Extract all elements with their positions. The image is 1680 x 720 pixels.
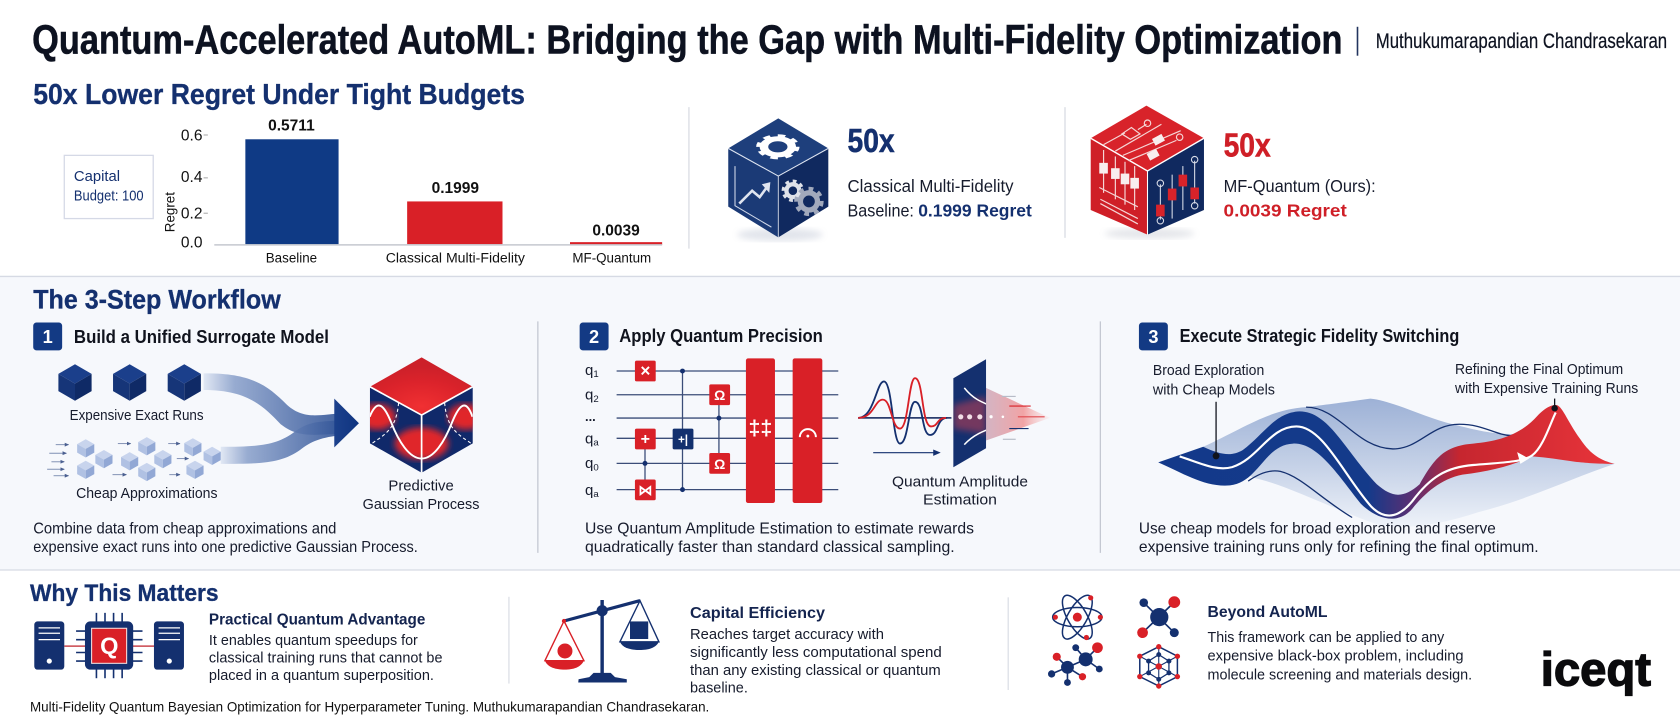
icon: lattice [1137, 644, 1180, 689]
step 3 title: Execute Strategic Fidelity Switching [1180, 326, 1459, 346]
bar chart: regret: Baseline [266, 251, 317, 266]
label: quantum amplitude estimation [892, 473, 1028, 509]
heading: workflow: The 3-Step Workflow [33, 285, 281, 315]
bar chart: regret: 0.5711 [268, 118, 315, 135]
panel: step 3 [1139, 322, 1638, 556]
step 2 badge [580, 322, 609, 350]
label: refining optimum: with Expensive Training Runs [1454, 380, 1638, 397]
quantum circuit: 1 [593, 369, 599, 380]
label: broad exploration: Broad Exploration [1153, 362, 1264, 379]
panel: step 1 [33, 322, 484, 556]
label: predictive GP: Gaussian Process [363, 496, 479, 513]
label: quantum amplitude estimation: Estimation [923, 492, 997, 509]
logo: iceqt: iceqt [1541, 643, 1651, 696]
bar chart: regret [163, 118, 662, 266]
title: Quantum-Accelerated AutoML: Bridging the Gap with Multi-Fidelity Optimization [32, 17, 1342, 63]
icon: quantum chip between servers [34, 613, 184, 678]
quantum circuit: q [585, 362, 593, 379]
quantum circuit: 2 [593, 394, 599, 405]
text: practical quantum advantage [209, 611, 442, 684]
step 2 badge: 2 [589, 327, 599, 347]
icon: quantum chip between servers: Q [100, 633, 118, 659]
text: capital efficiency: than any existing classical or quantum [690, 663, 941, 679]
icon: predictive Gaussian process cube [370, 357, 473, 473]
icon: atom [1053, 591, 1103, 643]
quantum circuit [585, 358, 838, 503]
label: classical baseline regret: Classical Multi-Fidelity [848, 176, 1014, 196]
step 3 description [1139, 521, 1539, 556]
quantum circuit: q [585, 482, 593, 499]
panel: step 2 [580, 322, 1050, 556]
quantum circuit: + [641, 430, 650, 448]
bar chart: regret: MF-Quantum [572, 251, 651, 266]
text: beyond AutoML [1208, 603, 1472, 683]
icons: cheap cubes with arrows [47, 437, 221, 481]
icon: molecule two [1048, 642, 1103, 686]
text: practical quantum advantage: Practical Quantum Advantage [209, 611, 425, 629]
quantum circuit: +| [678, 434, 688, 447]
label: predictive GP [363, 478, 479, 513]
step 2 description: quadratically faster than standard classical sampling. [585, 539, 955, 556]
label: classical baseline regret [848, 176, 1032, 220]
step 2 title: Apply Quantum Precision [619, 326, 823, 346]
step 3 description: Use cheap models for broad exploration and reserve [1139, 521, 1496, 538]
quantum circuit: q [585, 455, 593, 472]
step 1 description [33, 521, 418, 556]
quantum circuit: 0 [593, 462, 599, 473]
step 3 badge: 3 [1148, 327, 1158, 347]
workflow background band [0, 276, 1680, 570]
bar chart: regret: Classical Multi-Fidelity [386, 251, 525, 266]
text: capital efficiency: baseline. [690, 681, 748, 697]
step 2 description [585, 521, 974, 556]
panel: classical baseline stat [728, 118, 1032, 241]
bar chart: regret: 0.0039 [592, 223, 640, 240]
label: quantum regret [1224, 176, 1376, 220]
label: refining optimum [1454, 361, 1638, 397]
label: broad exploration: with Cheap Models [1152, 381, 1275, 398]
icon: red circuit cube [1091, 106, 1204, 239]
quantum circuit: q [585, 387, 593, 404]
text: capital efficiency [690, 604, 942, 697]
panel: regret results [33, 79, 662, 266]
text: beyond AutoML: Beyond AutoML [1208, 603, 1328, 621]
step 3 badge [1139, 322, 1168, 350]
quantum circuit: a [593, 438, 599, 449]
diagram: amplitude estimation waves [858, 359, 1050, 467]
quantum circuit: a [593, 489, 599, 500]
panel: beyond AutoML [1048, 591, 1472, 689]
label: expensive runs: Expensive Exact Runs [70, 407, 204, 424]
quantum circuit: q [585, 431, 593, 448]
chart: fidelity switching landscape [1158, 399, 1615, 527]
text: practical quantum advantage: classical training runs that cannot be [209, 651, 442, 667]
label: quantum regret: 0.0039 Regret [1224, 200, 1347, 220]
label: classical baseline regret: 0.1999 Regret [918, 200, 1032, 220]
quantum circuit: ⋈ [638, 482, 652, 498]
ribbons merging [204, 373, 359, 464]
step 3 description: expensive training runs only for refining the final optimum. [1139, 539, 1539, 556]
step 1 description: Combine data from cheap approximations and [33, 521, 336, 538]
label: quantum regret: MF-Quantum (Ours): [1224, 176, 1376, 196]
callout: capital budget: Capital [74, 168, 120, 185]
text: beyond AutoML: molecule screening and materials design. [1208, 667, 1472, 683]
bar chart: regret: Regret [163, 192, 178, 232]
stat: quantum 50x: 50x [1224, 127, 1271, 164]
text: beyond AutoML: This framework can be applied to any [1208, 630, 1445, 646]
quantum circuit: ... [585, 409, 596, 424]
panel: practical quantum advantage [34, 611, 443, 684]
step 1 badge [33, 322, 62, 350]
label: classical baseline regret: Baseline: [848, 200, 914, 220]
label: refining optimum: Refining the Final Optimum [1455, 361, 1623, 378]
label: cheap approximations: Cheap Approximations [76, 485, 218, 502]
bar chart: regret: 0.0 [181, 234, 203, 251]
step 2 description: Use Quantum Amplitude Estimation to estimate rewards [585, 521, 974, 538]
panel: MF-Quantum stat [1091, 106, 1376, 239]
label: broad exploration [1152, 362, 1275, 398]
text: practical quantum advantage: It enables quantum speedups for [209, 633, 418, 649]
icons: expensive cubes [58, 364, 201, 401]
text: capital efficiency: Capital Efficiency [690, 604, 825, 622]
label: quantum amplitude estimation: Quantum Amplitude [892, 473, 1028, 490]
icon: molecule one [1137, 596, 1180, 638]
step 1 title: Build a Unified Surrogate Model [74, 327, 329, 347]
text: practical quantum advantage: placed in a quantum superposition. [209, 668, 434, 684]
quantum circuit: × [640, 361, 650, 381]
callout: capital budget: Budget: 100 [74, 187, 144, 204]
step 1 description: expensive exact runs into one predictive Gaussian Process. [33, 539, 418, 556]
text: beyond AutoML: expensive black-box problem, including [1208, 649, 1464, 665]
quantum circuit: Ω [714, 456, 725, 472]
bar chart: regret: 0.6 [181, 127, 202, 144]
label: predictive GP: Predictive [388, 478, 454, 495]
quantum circuit: ‡‡ [748, 416, 772, 440]
step 1 badge: 1 [43, 327, 53, 347]
panel: capital efficiency [545, 600, 942, 697]
heading: why this matters: Why This Matters [30, 580, 219, 607]
icon: navy gear cube [728, 118, 828, 241]
callout: capital budget [64, 155, 153, 219]
icon: balance scale [545, 600, 659, 682]
stat: classical 50x: 50x [848, 123, 895, 160]
bar chart: regret: 0.4 [181, 169, 203, 186]
bar chart: regret: 0.2 [181, 206, 202, 223]
heading: lower regret: 50x Lower Regret Under Tight Budgets [33, 79, 525, 111]
diagram: data merge into surrogate [47, 357, 484, 513]
text: capital efficiency: Reaches target accuracy with [690, 627, 884, 643]
bar chart: regret: 0.1999 [432, 180, 479, 197]
quantum circuit: Ω [714, 387, 725, 403]
footer citation: Multi-Fidelity Quantum Bayesian Optimization for Hyperparameter Tuning. Muthukumarapandian Chandrasekaran. [30, 698, 709, 714]
text: capital efficiency: significantly less computational spend [690, 645, 942, 661]
